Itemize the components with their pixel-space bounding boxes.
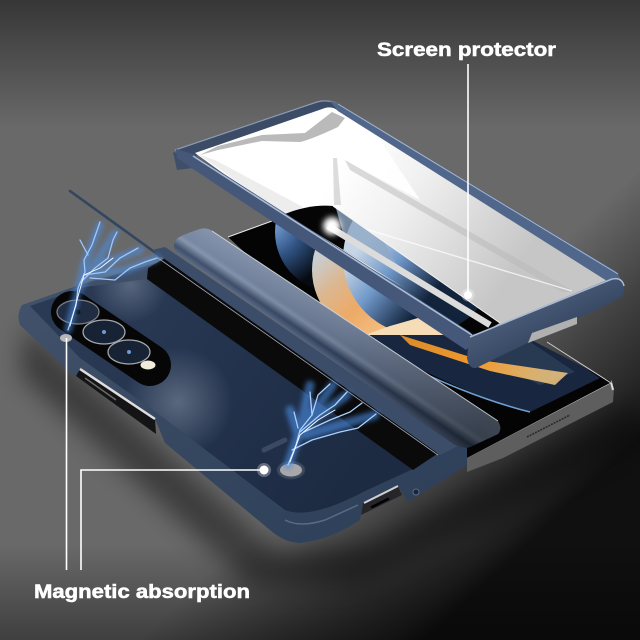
- right rail: [330, 101, 622, 282]
- glass: left shade: [198, 154, 303, 215]
- panel sheen upper: [30, 279, 413, 513]
- side buttons strip: [76, 369, 156, 434]
- phone: inner display and frame: [228, 220, 614, 472]
- top-left rail: [175, 101, 340, 156]
- hinge flap plate and bar: [70, 191, 500, 455]
- panel sheen lower: [30, 279, 413, 513]
- wallpaper: orange streak: [400, 335, 568, 385]
- lens 3: [108, 340, 150, 364]
- back panel: [30, 279, 413, 513]
- wallpaper: stars: [492, 342, 574, 385]
- glass: white lobe: [335, 118, 420, 200]
- wallpaper: blue planet: [344, 264, 462, 328]
- see-through window: [286, 206, 500, 332]
- callout line: camera magnet: [66, 338, 68, 570]
- label: Screen protector: Screen protector: [377, 40, 557, 61]
- lens 1: [57, 300, 99, 324]
- magnet disc on panel: [264, 440, 305, 479]
- wallpaper: blue sphere: [275, 224, 315, 288]
- USB port: [361, 486, 402, 515]
- screen protector: frame and glass: [173, 101, 624, 368]
- callout line: screen protector: [462, 64, 474, 302]
- wallpaper: peach fold: [368, 318, 444, 335]
- back case with cut-outs: [18, 262, 467, 543]
- callout line: panel magnet: [81, 463, 271, 570]
- wallpaper: lower swirl: [365, 330, 600, 412]
- frame tab at left corner: [173, 152, 193, 170]
- lower-left rail: [176, 149, 476, 350]
- wallpaper: orange disc: [312, 250, 387, 334]
- glass: vertical streak: [333, 158, 341, 205]
- magnet dot by camera: [60, 334, 72, 342]
- lightning: lower magnet: [288, 384, 376, 465]
- rim highlight: [285, 505, 358, 524]
- label: Magnetic absorption: Magnetic absorption: [34, 582, 250, 603]
- lens 2: [83, 320, 125, 344]
- glass: thin white reflection: [362, 228, 572, 291]
- charging port cut-out: [528, 317, 577, 343]
- glass: diagonal gray band: [345, 160, 575, 292]
- microphone hole: [413, 489, 419, 495]
- lightning: camera-side magnet: [68, 222, 157, 330]
- camera island: [57, 300, 156, 370]
- glass: gray band top corner: [200, 112, 345, 155]
- black gap between panel and hinge: [147, 258, 440, 470]
- flash: [140, 360, 156, 370]
- glass: [195, 107, 607, 333]
- front plate: [467, 278, 624, 368]
